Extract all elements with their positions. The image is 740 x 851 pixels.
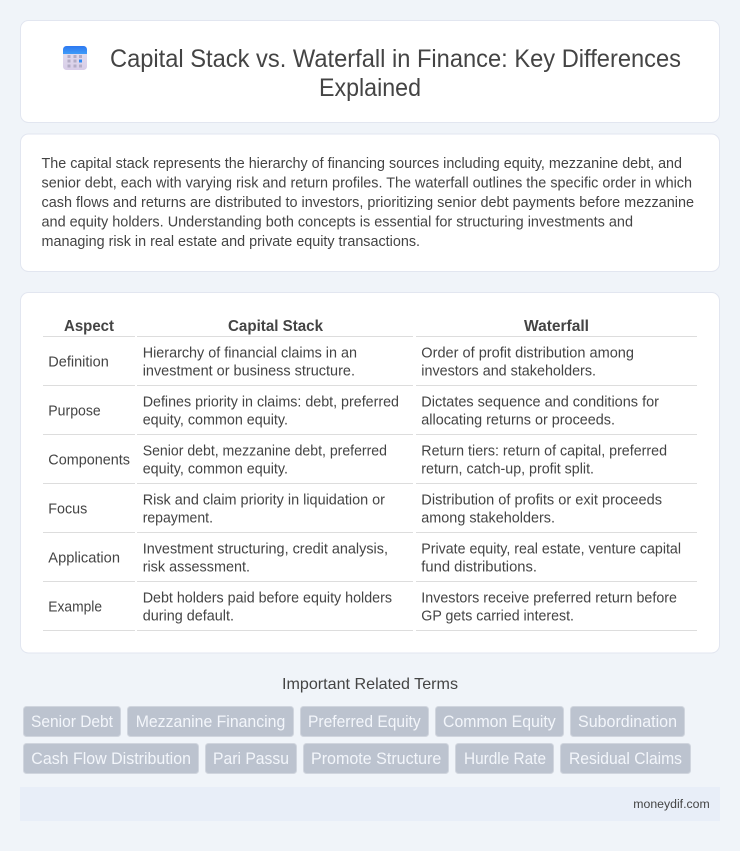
- related term tags: Cash Flow Distribution: [31, 750, 191, 768]
- row: focus: repayment.: [143, 510, 213, 526]
- row: components: Senior debt, mezzanine debt, preferred: [143, 444, 387, 460]
- intro text: The capital stack represents the hierarchy of financing sources including equity, mezzanine debt, and: [42, 156, 682, 172]
- row: definition: investment or business structure.: [143, 364, 355, 380]
- intro text: [42, 156, 694, 250]
- related term tags: Senior Debt: [31, 713, 113, 731]
- footer: [20, 787, 720, 821]
- row: definition: investors and stakeholders.: [421, 364, 596, 380]
- row: definition: [48, 346, 634, 380]
- row: application: [48, 542, 681, 576]
- panel: header: [20, 20, 720, 122]
- related term tags: Common Equity: [443, 713, 557, 731]
- row: example: Investors receive preferred return before: [421, 590, 677, 606]
- row: focus: among stakeholders.: [421, 510, 555, 526]
- row: example: GP gets carried interest.: [421, 608, 574, 624]
- related term tags: Residual Claims: [569, 750, 682, 768]
- row: application: risk assessment.: [143, 560, 250, 576]
- intro text: and equity holders. Understanding both concepts is essential for structuring investments and: [42, 214, 633, 230]
- related term tags: Preferred Equity: [308, 713, 422, 731]
- row: components: equity, common equity.: [143, 462, 288, 478]
- row: purpose: Purpose: [48, 404, 101, 420]
- title: [110, 45, 681, 102]
- row: purpose: allocating returns or proceeds.: [421, 412, 615, 428]
- title: Explained: [319, 74, 421, 102]
- title: Capital Stack vs. Waterfall in Finance: Key Differences: [110, 45, 681, 73]
- row: purpose: Defines priority in claims: debt, preferred: [143, 394, 399, 410]
- row: application: Application: [48, 550, 120, 566]
- related term tags: Mezzanine Financing: [136, 713, 285, 731]
- row: focus: Focus: [48, 502, 87, 518]
- intro text: senior debt, each with varying risk and return profiles. The waterfall outlines the specific order in which: [42, 176, 692, 192]
- row: purpose: equity, common equity.: [143, 412, 288, 428]
- row: definition: Order of profit distribution among: [421, 346, 634, 362]
- row: application: Private equity, real estate, venture capital: [421, 542, 681, 558]
- row: definition: Definition: [48, 354, 109, 370]
- table header: Capital Stack: [228, 318, 323, 335]
- table header: Aspect: [64, 318, 114, 335]
- panel: introduction: [20, 134, 720, 272]
- intro text: managing risk in real estate and private equity transactions.: [42, 234, 420, 250]
- related term tags: [24, 706, 690, 774]
- row: definition: Hierarchy of financial claims in an: [143, 346, 357, 362]
- row: application: fund distributions.: [421, 560, 537, 576]
- row: purpose: [48, 394, 659, 428]
- row: example: [48, 590, 677, 624]
- related term tags: Promote Structure: [311, 750, 441, 768]
- row: example: Debt holders paid before equity holders: [143, 590, 392, 606]
- row: focus: Distribution of profits or exit proceeds: [421, 492, 662, 508]
- row: components: return, catch-up, profit split.: [421, 462, 594, 478]
- row: components: Return tiers: return of capital, preferred: [421, 444, 667, 460]
- intro text: cash flows and returns are distributed to investors, prioritizing senior debt payments before mezzanine: [42, 195, 694, 211]
- row: components: [48, 444, 667, 478]
- row: purpose: Dictates sequence and conditions for: [421, 394, 659, 410]
- panel: comparison table: [20, 292, 720, 653]
- row: example: during default.: [143, 608, 234, 624]
- table header: [64, 318, 589, 335]
- footer: moneydif.com: [633, 797, 710, 811]
- related term tags: Subordination: [578, 713, 677, 731]
- related term tags: Pari Passu: [213, 750, 289, 768]
- row: focus: [48, 492, 662, 526]
- row: focus: Risk and claim priority in liquidation or: [143, 492, 385, 508]
- row: example: Example: [48, 600, 102, 616]
- table header: Waterfall: [524, 318, 589, 335]
- row: components: Components: [48, 452, 130, 468]
- heading: related terms: Important Related Terms: [282, 676, 458, 693]
- related term tags: Hurdle Rate: [464, 750, 546, 768]
- icon: calendar: [63, 46, 87, 70]
- row: application: Investment structuring, credit analysis,: [143, 542, 388, 558]
